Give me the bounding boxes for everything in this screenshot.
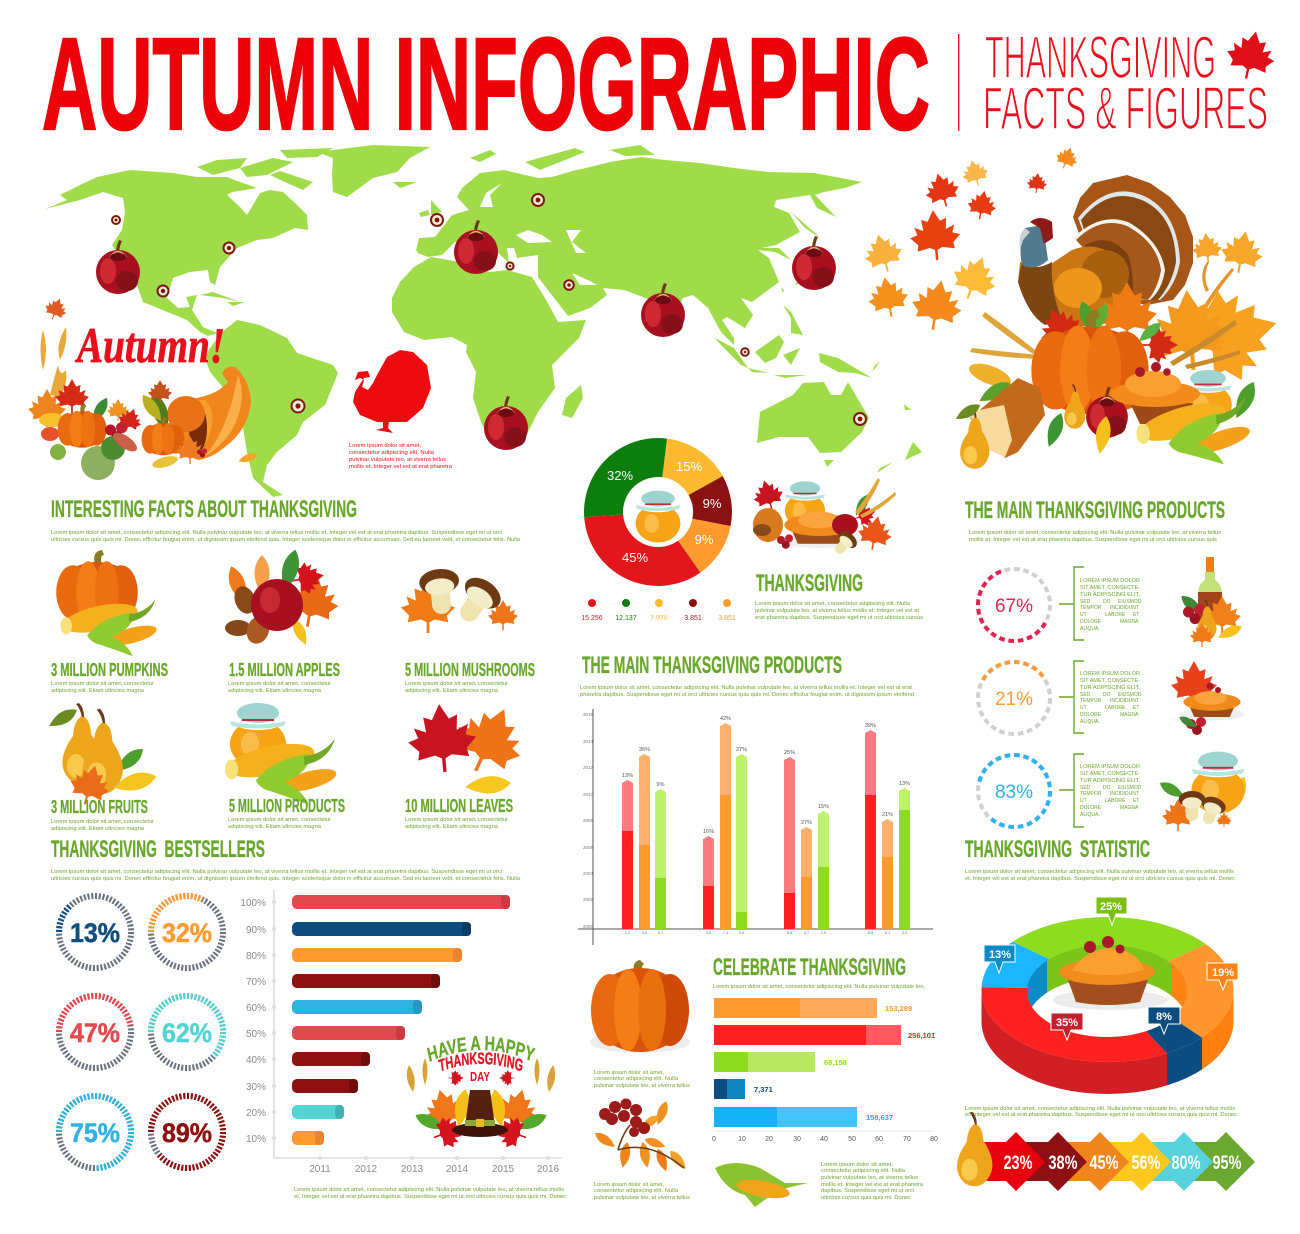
- icon: jar and corn: [225, 703, 339, 805]
- stat: 67%: MAGNA: [1120, 619, 1139, 625]
- intro text: mollis et. Integer vel est at erat pharetra dapibus. Suspendisse eget mi ut orci ultricies cursus quis: [969, 537, 1217, 543]
- icon: autumn leaves: [405, 695, 535, 796]
- fact: 1.5 million apples: Lorem ipsum dolor sit amet, consectetur: [228, 681, 331, 687]
- horizontal bar chart: 100%: [240, 898, 266, 909]
- stat: 21%: INCIDIDUNT: [1110, 698, 1139, 704]
- stat: 67%: TUR ADIPISCING ELIT,: [1080, 592, 1140, 598]
- bar group 2: [703, 716, 747, 929]
- donut chart with jar: 45%: [622, 550, 648, 565]
- gauge: 32%: [151, 896, 223, 968]
- gauge: 62%: 62%: [162, 1018, 212, 1048]
- vertical bar chart: 3.6: [706, 930, 712, 935]
- fact: 3 million fruits: adipiscing elit. Etiam ultricies magna: [51, 826, 145, 832]
- donut caption: Lorem ipsum dolor sit amet, consectetur adipiscing elit. Nulla pulvinar vulputate leo, at viverra tellus mollis: [965, 1106, 1235, 1112]
- stat: 21%: LOREM IPSUM DOLOR: [1080, 671, 1140, 677]
- stacked bars: 30: [793, 1136, 801, 1143]
- arrow strip with percentages: 56%: [1132, 1153, 1161, 1174]
- vertical bar chart: 2002: [583, 897, 594, 902]
- vertical bar chart: 1.9: [821, 930, 827, 935]
- stacked bars: 158,637: [866, 1113, 893, 1122]
- intro text: Lorem ipsum dolor sit amet, consectetur adipiscing elit. Nulla pulvinar vulputate leo, at viverra tellus mollis et. Integer vel est at erat pharetra dapibus. Suspendisse eget mi ut orci: [51, 869, 502, 875]
- stat: 21%: MAGNA: [1120, 712, 1139, 718]
- donut caption: et. Integer vel est at erat pharetra dapibus. Suspendisse eget mi ut orci ultricies cursus quis quis mi. Donec: [965, 1112, 1237, 1118]
- donut chart with jar: 15%: [676, 459, 702, 474]
- fact: 3 million pumpkins: [51, 660, 168, 694]
- callout: 8%: 8%: [1156, 1011, 1172, 1023]
- pumpkin text: consectetur adipiscing elit. Nulla: [594, 1076, 679, 1082]
- stat: 67%: INCIDIDUNT: [1110, 605, 1139, 611]
- stacked bars: 80: [930, 1136, 938, 1143]
- 3D donut chart: [970, 897, 1245, 1100]
- stat: 21%: TUR ADIPISCING ELIT,: [1080, 685, 1140, 691]
- callout: 13%: [984, 945, 1015, 973]
- horizontal bar chart: [240, 890, 562, 1175]
- top surface: [982, 917, 1234, 1062]
- pumpkin text: Lorem ipsum dolor sit amet,: [594, 1070, 664, 1076]
- gauge: 47%: 47%: [70, 1018, 120, 1048]
- arrow strip with percentages: 38%: [1048, 1153, 1078, 1174]
- intro text: Lorem ipsum dolor sit amet, consectetur adipiscing elit. Nulla pulvinar vulputate leo, at viverra tellus mollis et. Integer vel est at erat pharetra dapibus. Suspendisse eget mi ut orci: [51, 530, 502, 536]
- vertical bar chart: 8.8: [787, 930, 793, 935]
- horizontal bar chart: 2016: [537, 1164, 560, 1175]
- gauge: 75%: 75%: [70, 1118, 120, 1148]
- intro text: Lorem ipsum dolor sit amet, consectetur adipiscing elit. Nulla pulvinar vulputate leo, at viverra tellus: [969, 530, 1221, 536]
- heading: THANKSGIVING BESTSELLERS: [51, 836, 265, 863]
- illustration: turkey and harvest: [860, 144, 1288, 470]
- text: thanksgiving statistic: [965, 869, 1235, 882]
- vertical bar chart: 2004: [583, 871, 594, 876]
- icon: jar with mushrooms: [1157, 752, 1251, 831]
- gauge: 13%: [59, 896, 131, 968]
- gauge: 62%: [151, 996, 223, 1068]
- stat: 67%: DO: [1103, 599, 1111, 605]
- icon: pears: [46, 703, 158, 809]
- stat: 67%: UT: [1080, 612, 1087, 618]
- callout: 35%: 35%: [1056, 1017, 1078, 1029]
- stat: 83%: 83%: [995, 782, 1033, 803]
- intro text: [51, 869, 521, 882]
- fact: 10 million leaves: adipiscing elit. Etiam ultricies magna: [405, 824, 499, 830]
- donut legend: 15.256: [581, 615, 603, 622]
- donut chart with jar: 32%: [607, 468, 633, 483]
- bar group 1: 9%: [657, 782, 665, 788]
- stacked bars: 50: [848, 1136, 856, 1143]
- donut caption: [965, 1106, 1237, 1118]
- stat: 67%: ET: [1133, 612, 1139, 618]
- donut legend: 3.851: [718, 615, 736, 622]
- stat: 83%: TUR ADIPISCING ELIT,: [1080, 778, 1140, 784]
- section: thanksgiving bestsellers: [51, 836, 566, 1200]
- stat: 21%: DO: [1103, 692, 1111, 698]
- rowan text: consectetur adipiscing elit. Nulla: [594, 1188, 679, 1194]
- horizontal bar chart: 2014: [446, 1164, 469, 1175]
- gauge: 75%: [59, 1096, 131, 1168]
- stat: 21%: SED: [1080, 692, 1091, 698]
- stacked bars: 20: [765, 1136, 773, 1143]
- text: thanksgiving statistic: et. Integer vel est at erat pharetra dapibus. Suspendisse eget mi ut orci ultricies cursus quis quis mi. Donec: [965, 876, 1235, 882]
- vertical bar chart: 5.8: [739, 930, 745, 935]
- gauge: 47%: [59, 996, 131, 1068]
- rowan text: pulvinar vulputate leo, at viverra tellus: [594, 1195, 690, 1201]
- fact: 10 million leaves: 10 MILLION LEAVES: [405, 796, 513, 816]
- bar group 2: 16%: [703, 829, 714, 835]
- horn: [180, 367, 251, 460]
- donut chart with jar: 9%: [703, 496, 722, 511]
- stat: 21%: DOLORE: [1080, 712, 1102, 718]
- fact: 5 million mushrooms: Lorem ipsum dolor sit amet, consectetur: [405, 681, 508, 687]
- heading: main products center: THE MAIN THANKSGIVING PRODUCTS: [582, 652, 842, 679]
- arrow strip with percentages: 95%: [1212, 1153, 1242, 1174]
- stat: 67%: [965, 556, 1142, 654]
- bar group 1: [622, 747, 666, 929]
- horizontal bar chart: 60%: [246, 1003, 266, 1014]
- fact: 10 million leaves: Lorem ipsum dolor sit amet, consectetur: [405, 817, 508, 823]
- stat: 83%: DOLORE: [1080, 805, 1102, 811]
- vertical bar chart: 2014: [583, 739, 594, 744]
- vertical bar chart: 9.6: [642, 930, 648, 935]
- small red leaf: [42, 295, 70, 323]
- fact: 5 million mushrooms: [405, 660, 535, 694]
- illustration: thanksgiving pie: [750, 477, 896, 559]
- stat: 21%: SIT AMET, CONSECTE-: [1080, 678, 1140, 684]
- horizontal bar chart: 2012: [355, 1164, 378, 1175]
- pumpkin text: pulvinar vulputate leo, at viverra tellus: [594, 1083, 690, 1089]
- vertical bar chart: 1.2: [625, 930, 631, 935]
- bar group 3: 15%: [818, 804, 829, 810]
- muffin: [1052, 936, 1168, 1010]
- stat: 83%: TEMPOR: [1080, 791, 1102, 797]
- bar group 3: 27%: [801, 820, 812, 826]
- vertical bar chart: 2012: [583, 765, 594, 770]
- section: celebrate thanksgiving: [590, 954, 938, 1207]
- heading: thanksgiving: THANKSGIVING: [756, 570, 863, 597]
- icon: rowan berries: [593, 1098, 689, 1173]
- bar chart caption: [294, 1187, 566, 1200]
- stat: 21%: LABORE: [1105, 705, 1126, 711]
- text: main products center: pharetra dapibus. Suspendisse eget mi ut orci ultricies cursus quis quis mi. Donec efficitur feugiat enim, ut dignissim ipsum eleifend: [580, 692, 914, 698]
- stat: 83%: ALIQUA.: [1080, 812, 1100, 818]
- stacked bars: 68,158: [824, 1058, 847, 1067]
- fact: 5 million products: 5 MILLION PRODUCTS: [229, 796, 345, 816]
- gauge: 32%: 32%: [162, 918, 212, 948]
- donut legend: [581, 599, 736, 622]
- stat: 67%: SIT AMET, CONSECTE-: [1080, 585, 1140, 591]
- icon: red maple leaf: [1223, 27, 1279, 83]
- stacked bars: 7,371: [754, 1085, 773, 1094]
- icon: large pumpkin: [590, 960, 690, 1053]
- stacked bars: [712, 998, 938, 1143]
- fact: 3 million pumpkins: adipiscing elit. Etiam ultricies magna: [51, 688, 145, 694]
- badge: have a happy thanksgiving day: THANKSGIVING: [438, 1052, 523, 1072]
- stat: 83%: EIUSMOD: [1118, 785, 1142, 791]
- pumpkin text: [594, 1070, 690, 1089]
- donut legend: 3.851: [684, 615, 702, 622]
- stat: 83%: SIT AMET, CONSECTE-: [1080, 771, 1140, 777]
- vertical bar chart: 2006: [583, 845, 594, 850]
- bar chart caption: Lorem ipsum dolor sit amet, consectetur adipiscing elit. Nulla pulvinar vulputate leo, at viverra tellus mollis: [294, 1187, 564, 1193]
- callout: 19%: 19%: [1212, 967, 1234, 979]
- donut legend: 12.137: [615, 615, 637, 622]
- stat: 21%: ET: [1133, 705, 1139, 711]
- icon: pear: [957, 1112, 992, 1186]
- intro text: [969, 530, 1221, 543]
- stat: 83%: SED: [1080, 785, 1091, 791]
- badge: have a happy thanksgiving day: HAVE A HAPPY: [426, 1036, 536, 1062]
- map note text: pulvinar vulputate leo, at viverra tellus: [349, 457, 446, 463]
- stacked bars: 256,101: [908, 1031, 935, 1040]
- icon: corn: [715, 1163, 808, 1207]
- vertical bar chart: 2016: [583, 712, 594, 717]
- bar group 2: 42%: [720, 716, 731, 722]
- bar group 1: 36%: [639, 747, 650, 753]
- corn text: pulvinar vulputate leo, at viverra tellus: [821, 1175, 918, 1181]
- icon: oil bottle with leaves: [1178, 557, 1244, 647]
- corn text: dapibus. Suspendisse eget mi ut orci: [821, 1188, 914, 1194]
- corn text: consectetur adipiscing elit. Nulla: [821, 1168, 906, 1174]
- icon: pie with maple leaf: [1171, 661, 1245, 735]
- gauge: 89%: [151, 1096, 223, 1168]
- stat: 21%: TEMPOR: [1080, 698, 1102, 704]
- fact: 5 million products: adipiscing elit. Etiam ultricies magna: [228, 824, 322, 830]
- stat: 21%: UT: [1080, 705, 1087, 711]
- horizontal bar chart: 80%: [246, 951, 266, 962]
- fact: 1.5 million apples: 1.5 MILLION APPLES: [229, 660, 340, 680]
- gauge: 89%: 89%: [162, 1118, 212, 1148]
- stacked bars: 40: [820, 1136, 828, 1143]
- intro text: [51, 530, 521, 543]
- vertical bar chart: 2010: [583, 792, 594, 797]
- heading: thanksgiving statistic: THANKSGIVING STATISTIC: [965, 836, 1150, 863]
- text: thanksgiving statistic: Lorem ipsum dolor sit amet, consectetur adipiscing elit. Nulla pulvinar vulputate leo, at viverra tellus mollis: [965, 869, 1234, 875]
- callout: 13%: 13%: [989, 949, 1011, 961]
- horizontal bar chart: 2011: [309, 1164, 331, 1175]
- illustration: autumn cornucopia: [28, 317, 259, 480]
- vertical bar chart: 5.1: [658, 930, 664, 935]
- heading: INTERESTING FACTS ABOUT THANKSGIVING: [51, 496, 357, 523]
- icon: mushrooms: [401, 567, 518, 633]
- callout: 8%: [1148, 1007, 1180, 1034]
- stat: 67%: SED: [1080, 599, 1091, 605]
- text: main products center: Lorem ipsum dolor sit amet, consectetur adipiscing elit. Nulla pulvinar vulputate leo, at viverra tellus mollis et. Integer vel est at erat: [580, 685, 912, 691]
- stat: 83%: UT: [1080, 798, 1087, 804]
- rowan text: [594, 1182, 690, 1201]
- gauge: 13%: 13%: [70, 918, 120, 948]
- icon: apple with leaves: [224, 548, 343, 647]
- arrow strip with percentages: 23%: [1004, 1153, 1033, 1174]
- vertical bar chart: 3.4: [902, 930, 908, 935]
- donut legend: 7.976: [650, 615, 668, 622]
- stat: 67%: ALIQUA.: [1080, 626, 1100, 632]
- bar chart caption: et. Integer vel est at erat pharetra dapibus. Suspendisse eget mi ut orci ultricies cursus quis quis mi. Donec: [294, 1194, 566, 1200]
- bar group 4: 39%: [865, 723, 876, 729]
- stat: 21%: 21%: [995, 689, 1033, 710]
- callout: 19%: [1207, 963, 1238, 990]
- fact: 10 million leaves: [405, 796, 513, 830]
- subtext: Lorem ipsum dolor sit amet, consectetur adipiscing elit. Nulla pulvinar vulputate leo,: [713, 984, 925, 990]
- fact: 5 million mushrooms: 5 MILLION MUSHROOMS: [405, 660, 535, 680]
- vertical bar chart: 8.5: [868, 930, 874, 935]
- badge: have a happy thanksgiving day: DAY: [470, 1069, 490, 1084]
- horizontal bar chart: 20%: [246, 1108, 266, 1119]
- fact: 3 million pumpkins: 3 MILLION PUMPKINS: [51, 660, 168, 680]
- lettering: Autumn: Autumn!: [75, 317, 225, 373]
- map location markers: [112, 194, 866, 425]
- corn text: mollis et. Integer vel est at erat pharetra: [821, 1182, 924, 1188]
- horizontal bar chart: 40%: [246, 1055, 266, 1066]
- fact: 3 million pumpkins: Lorem ipsum dolor sit amet, consectetur: [51, 681, 154, 687]
- turkey: [1018, 175, 1193, 330]
- horizontal bar chart: 30%: [246, 1082, 266, 1093]
- fact: 3 million fruits: 3 MILLION FRUITS: [51, 797, 148, 817]
- stacked bars: 10: [738, 1136, 746, 1143]
- stat: 67%: TEMPOR: [1080, 605, 1102, 611]
- vertical bar chart: 7.4: [723, 930, 729, 935]
- stat: 83%: LOREM IPSUM DOLOR: [1080, 764, 1140, 770]
- stat: 67%: EIUSMOD: [1118, 599, 1142, 605]
- stacked bars: 70: [903, 1136, 911, 1143]
- text: thanksgiving: pulvinar vulputate leo, at viverra tellus mollis et. Integer vel est at: [755, 608, 919, 614]
- fact: 5 million products: [228, 796, 345, 830]
- stat: 83%: INCIDIDUNT: [1110, 791, 1139, 797]
- donut chart with jar: 9%: [695, 532, 714, 547]
- side walls: [982, 992, 1234, 1094]
- fact: 1.5 million apples: [228, 660, 340, 694]
- text: main products center: [580, 685, 914, 698]
- heading: CELEBRATE THANKSGIVING: [713, 954, 906, 981]
- badge: have a happy thanksgiving day: [406, 1036, 556, 1148]
- bar group 4: [865, 723, 910, 929]
- vertical bar chart: 4.7: [804, 930, 810, 935]
- stat: 21%: [965, 649, 1142, 747]
- horizontal bar chart: 2013: [401, 1164, 424, 1175]
- hole inner walls: [1027, 945, 1187, 1037]
- map note text: mollis et. Integer vel est at erat pharetra: [349, 464, 452, 470]
- map note text: consectetur adipiscing elit. Nulla: [349, 450, 434, 456]
- horizontal bar chart: 90%: [246, 925, 266, 936]
- bar group 1: 13%: [622, 773, 633, 779]
- callout: 25%: [1096, 897, 1127, 925]
- section: interesting facts about thanksgiving: [46, 496, 535, 832]
- icon: pumpkin and corn: [56, 550, 159, 656]
- corn text: ultricies cursus quis quis mi. Donec: [821, 1195, 911, 1201]
- corn text: Lorem ipsum dolor sit amet,: [821, 1162, 893, 1168]
- arrow strip with percentages: 80%: [1172, 1153, 1201, 1174]
- stacked bars: 0: [712, 1136, 716, 1143]
- stat: 83%: ET: [1133, 798, 1139, 804]
- callout: 35%: [1051, 1013, 1083, 1040]
- horizontal bar chart: 10%: [246, 1134, 266, 1145]
- rowan text: Lorem ipsum dolor sit amet,: [594, 1182, 664, 1188]
- stat: 67%: 67%: [995, 596, 1033, 617]
- callout: 25%: 25%: [1100, 901, 1122, 913]
- intro text: ultricies cursus quis quis mi. Donec efficitur feugiat enim, ut dignissim ipsum eleifend quis. Integer scelerisque dolor in efficitur accumsan. Sed eu laoreet velit, et consectetur felis. Nulla: [51, 537, 521, 543]
- vertical bar chart: 6.1: [885, 930, 891, 935]
- bar group 2: 27%: [736, 747, 747, 753]
- arrow strip with percentages: 45%: [1090, 1153, 1119, 1174]
- fact: 5 million products: Lorem ipsum dolor sit amet, consectetur: [228, 817, 331, 823]
- falling leaves: [860, 144, 1266, 334]
- stat: 21%: EIUSMOD: [1118, 692, 1142, 698]
- stat: 83%: LABORE: [1105, 798, 1126, 804]
- sea cut-outs: [480, 183, 597, 285]
- bar group 4: 13%: [899, 781, 910, 787]
- fact: 5 million mushrooms: adipiscing elit. Etiam ultricies magna: [405, 688, 499, 694]
- arrow strip with percentages: [975, 1132, 1255, 1191]
- text: thanksgiving: erat pharetra dapibus. Suspendisse eget mi ut orci ultricies cursus: [755, 615, 923, 621]
- text: thanksgiving: [755, 601, 923, 621]
- stat: 21%: ALIQUA.: [1080, 719, 1100, 725]
- fact: 1.5 million apples: adipiscing elit. Etiam ultricies magna: [228, 688, 322, 694]
- fact: 3 million fruits: Lorem ipsum dolor sit amet, consectetur: [51, 819, 154, 825]
- donut chart with jar: [584, 438, 732, 586]
- fact: 3 million fruits: [51, 797, 154, 832]
- section: main products right: [965, 497, 1251, 882]
- map apples: [96, 220, 836, 450]
- map note text: Lorem ipsum dolor sit amet,: [349, 443, 422, 449]
- horizontal bar chart: 70%: [246, 977, 266, 988]
- intro text: ultricies cursus quis quis mi. Donec efficitur feugiat enim, ut dignissim ipsum eleifend quis. Integer scelerisque dolor in efficitur accumsan. Sed eu laoreet velit, et consectetur felis. Nulla: [51, 876, 521, 882]
- bar group 4: 21%: [882, 812, 893, 818]
- stat: 83%: MAGNA: [1120, 805, 1139, 811]
- vertical bar chart: 2008: [583, 818, 594, 823]
- stacked bars: 153,289: [885, 1004, 912, 1013]
- stat: 67%: LABORE: [1105, 612, 1126, 618]
- icon: red turkey silhouette: [353, 350, 431, 433]
- stacked bars: 60: [875, 1136, 883, 1143]
- stat: 67%: LOREM IPSUM DOLOR: [1080, 578, 1140, 584]
- stat: 83%: [970, 747, 1142, 835]
- text: thanksgiving: Lorem ipsum dolor sit amet, consectetur adipiscing elit. Nulla: [755, 601, 911, 607]
- bar group 3: 25%: [784, 750, 795, 756]
- vertical bar chart: 2000: [583, 924, 594, 929]
- vertical bar chart: [578, 709, 933, 945]
- subtitle: thanksgiving facts and figures: [958, 24, 1268, 142]
- bar group 3: [784, 750, 829, 929]
- horizontal bar chart: 2015: [492, 1164, 515, 1175]
- map note text: [349, 443, 452, 470]
- corn text: [821, 1162, 924, 1201]
- stat: 83%: DO: [1103, 785, 1111, 791]
- horizontal bar chart: 50%: [246, 1029, 266, 1040]
- world map: [45, 145, 922, 497]
- stat: 67%: DOLORE: [1080, 619, 1102, 625]
